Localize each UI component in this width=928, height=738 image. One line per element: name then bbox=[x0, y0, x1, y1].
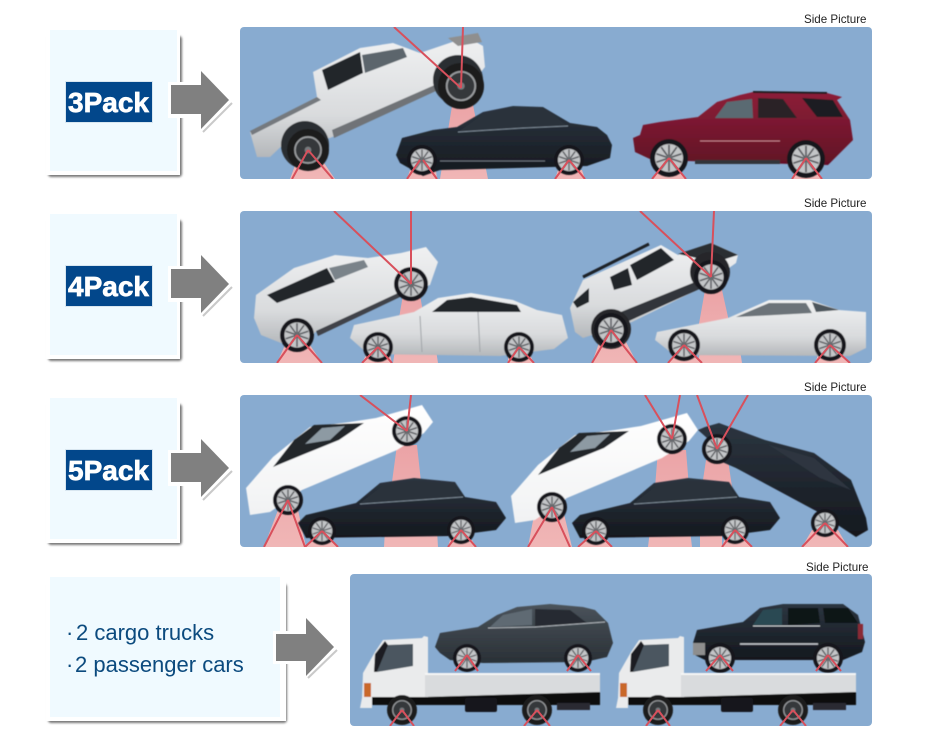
list item: passenger cars: · bbox=[66, 652, 73, 677]
white sedan centre bbox=[511, 413, 698, 523]
label: side picture row 1: Side Picture bbox=[804, 13, 867, 26]
grey FJ off-roader bbox=[570, 243, 738, 349]
black sedan centre bbox=[572, 478, 780, 545]
label: side picture row 4: Side Picture bbox=[806, 561, 869, 574]
dark SUV on truck 1 bbox=[435, 604, 613, 672]
white SUV bbox=[254, 247, 438, 352]
black sedan bbox=[396, 106, 612, 176]
arrow: row 2 bbox=[168, 250, 234, 318]
white corvette bbox=[655, 300, 866, 361]
tie-down lines bbox=[277, 211, 850, 363]
panel: cargo trucks vehicles bbox=[350, 574, 872, 726]
white sedan left bbox=[246, 405, 433, 515]
panel: 3Pack vehicles bbox=[240, 27, 872, 179]
card: 5Pack bbox=[46, 395, 182, 545]
black sedan tilted right bbox=[698, 423, 868, 537]
list item: passenger cars: 2 passenger cars bbox=[75, 652, 244, 677]
black sedan left bbox=[298, 478, 506, 545]
load cones bbox=[290, 100, 822, 179]
heading: 3Pack: 3Pack bbox=[68, 87, 149, 118]
label: side picture row 3: Side Picture bbox=[804, 381, 867, 394]
arrow: row 3 bbox=[168, 434, 234, 502]
heading: 4Pack: 4Pack bbox=[68, 271, 149, 302]
cargo truck 2 bbox=[616, 636, 856, 725]
panel: 5Pack vehicles bbox=[240, 395, 872, 547]
cargo truck 1 bbox=[360, 636, 600, 725]
heading: 5Pack: 5Pack bbox=[68, 455, 149, 486]
list item: cargo trucks: · bbox=[66, 620, 73, 645]
tie-down lines bbox=[264, 395, 848, 547]
label: side picture row 2: Side Picture bbox=[804, 197, 867, 210]
tie-down lines bbox=[292, 27, 822, 179]
red SUV bbox=[633, 92, 853, 178]
panel: 4Pack vehicles bbox=[240, 211, 872, 363]
arrow: row 1 bbox=[168, 66, 234, 134]
tie-down lines bbox=[390, 655, 841, 726]
load cones bbox=[277, 290, 850, 363]
black SUV on truck 2 bbox=[693, 604, 865, 673]
card: 4Pack bbox=[46, 211, 182, 361]
pickup truck bbox=[250, 33, 485, 171]
arrow: row 4 bbox=[273, 613, 340, 681]
list item: cargo trucks: 2 cargo trucks bbox=[76, 620, 214, 645]
load cones bbox=[264, 445, 848, 547]
card: 3Pack bbox=[46, 27, 182, 177]
card: 2 cargo trucks and 2 passenger cars bbox=[46, 575, 287, 723]
silver coupe bbox=[350, 293, 568, 362]
